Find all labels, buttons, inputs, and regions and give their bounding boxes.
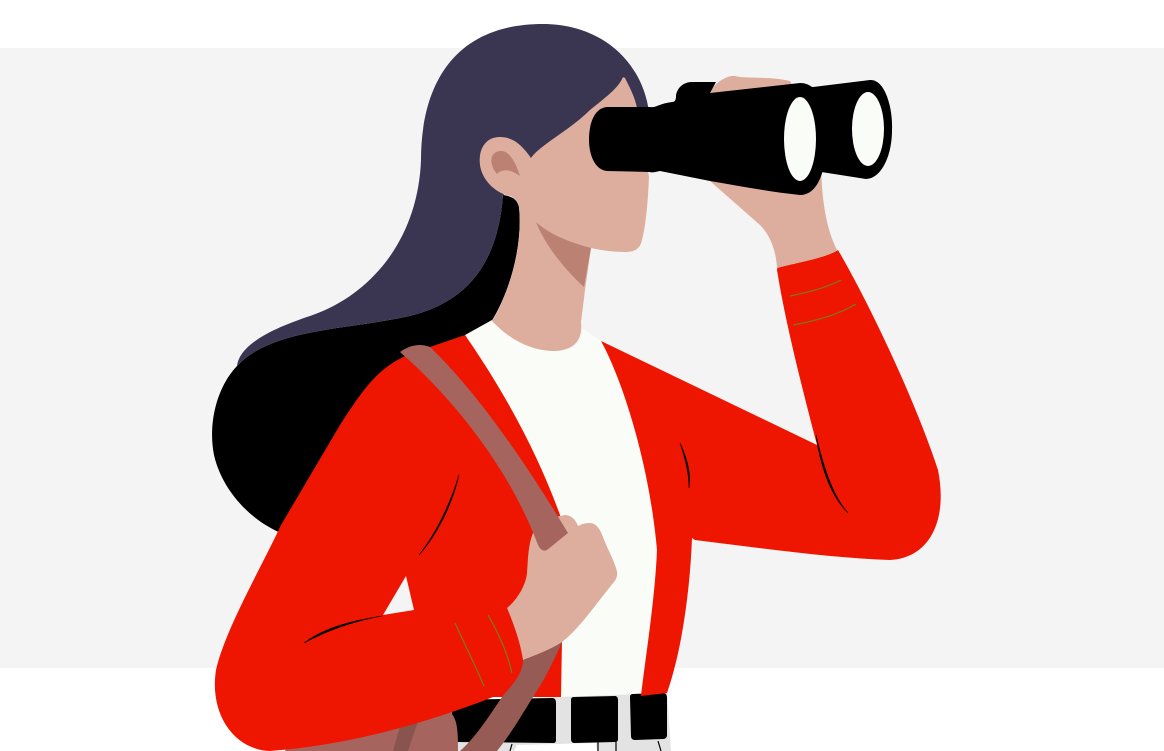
far barrel [805, 80, 892, 179]
cardigan: right panel and raised arm [601, 250, 941, 696]
fingers above binoculars [710, 76, 795, 95]
belt segment 2 [571, 696, 618, 743]
hair [212, 24, 649, 533]
bag body [285, 695, 458, 751]
trouser creases [510, 741, 661, 751]
hair: black lower section [212, 195, 520, 533]
ear [480, 137, 531, 196]
belt segment 3 [630, 693, 667, 740]
inner ear [491, 151, 520, 176]
lower strap [460, 642, 562, 751]
cardigan fold lines [304, 435, 848, 643]
hand below binoculars [710, 165, 837, 268]
raised hand [710, 76, 837, 268]
shoulder strap [400, 345, 568, 551]
hand holding strap [507, 515, 617, 660]
cuff stitching [455, 280, 856, 686]
bag strap fold [393, 710, 422, 751]
trouser white panel [514, 743, 597, 751]
red cardigan [215, 250, 941, 751]
trousers [456, 693, 671, 751]
gap between arm and body [383, 576, 414, 615]
bag [285, 695, 458, 751]
jaw shadow [536, 222, 591, 287]
face and neck skin [492, 77, 649, 351]
belt segment 1 [450, 698, 556, 743]
belt [450, 693, 667, 743]
near lens [784, 97, 816, 181]
white t-shirt [465, 320, 657, 697]
trouser waistband [456, 693, 671, 751]
cardigan: left body and arm [215, 335, 562, 751]
head and neck [480, 77, 649, 351]
near barrel [589, 82, 826, 195]
far lens [852, 92, 884, 166]
binoculars [589, 80, 892, 195]
hair: purple upper section [237, 24, 649, 366]
